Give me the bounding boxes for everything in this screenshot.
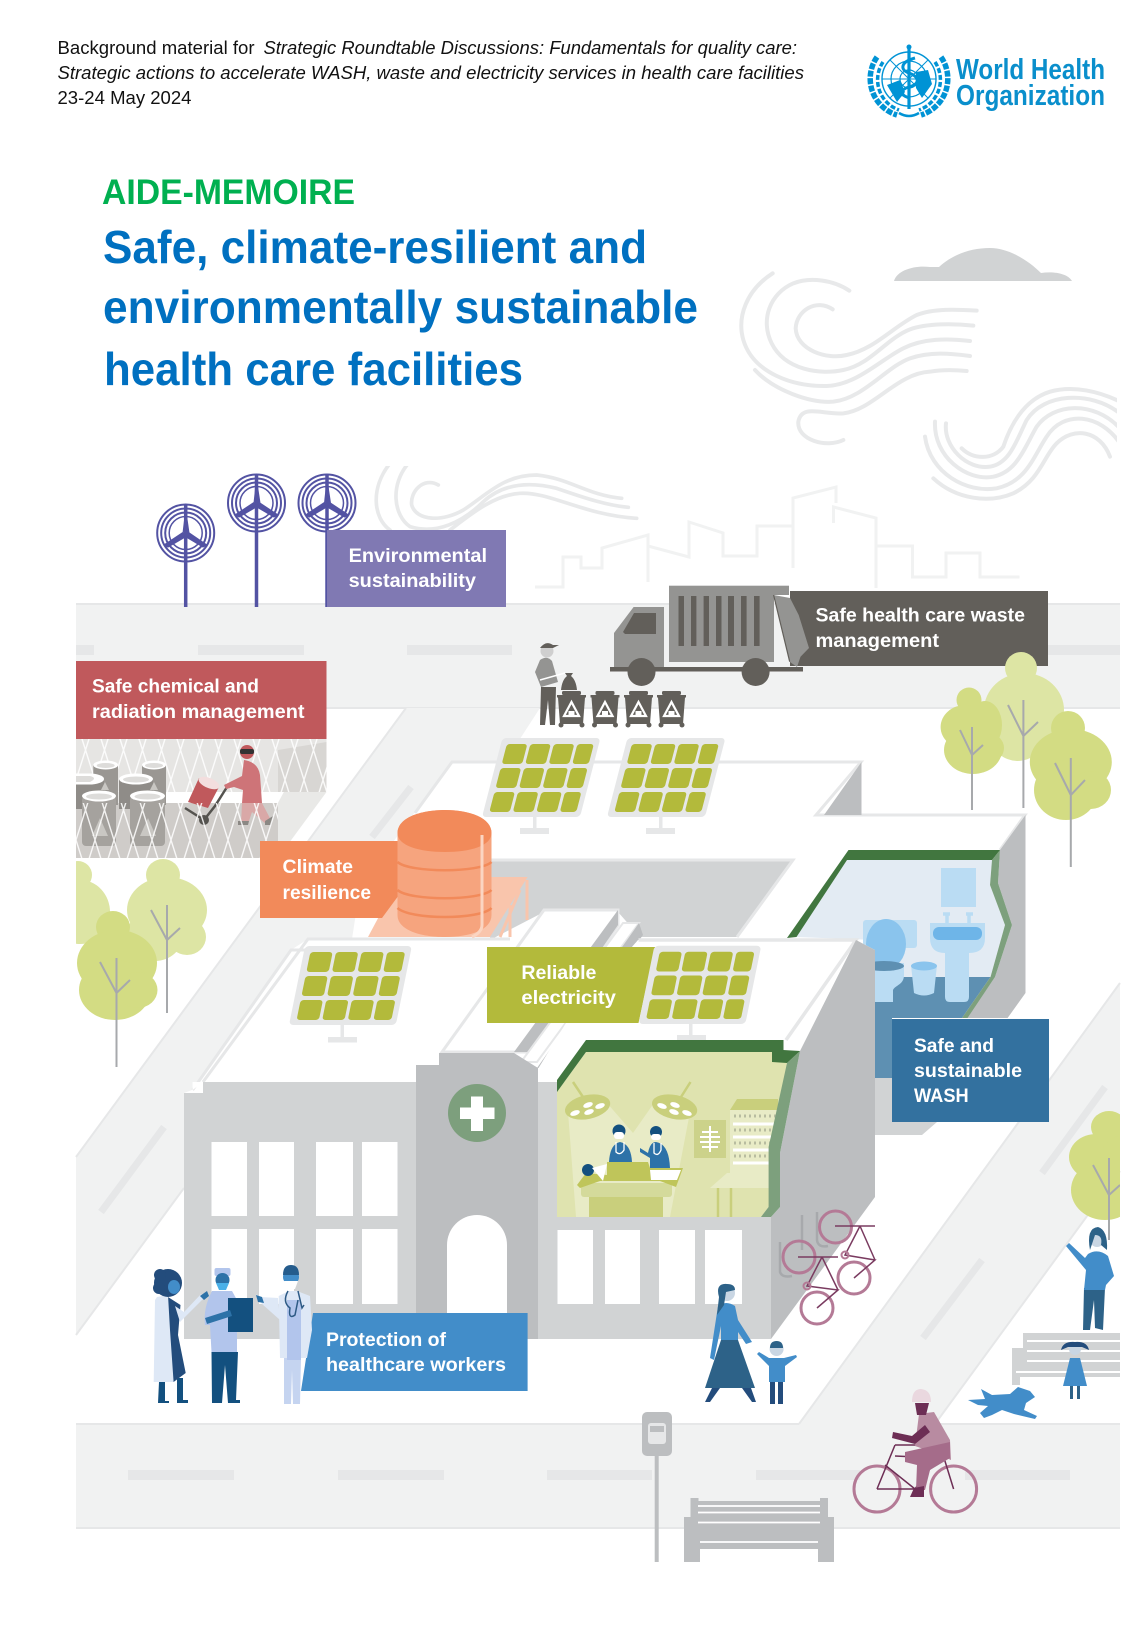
desk <box>710 1173 772 1217</box>
waste bins <box>557 673 686 728</box>
right bench with child <box>1012 1333 1120 1399</box>
x-ray <box>694 1120 726 1158</box>
lower lattice overlay <box>76 803 278 858</box>
WHO logo <box>870 44 1105 116</box>
cyclist <box>854 1389 977 1512</box>
title: health care facilities <box>104 343 523 395</box>
mirror <box>941 868 976 907</box>
right diagonal road <box>799 983 1120 1424</box>
WASH label: WASH <box>914 1086 969 1107</box>
courtyard <box>490 860 793 940</box>
bus stop sign <box>642 1412 672 1562</box>
reliable electricity label: electricity <box>521 988 616 1009</box>
lamps <box>563 1082 700 1124</box>
tree <box>127 859 207 1013</box>
toilet <box>850 919 917 1002</box>
child on bench <box>1061 1342 1089 1399</box>
reliable electricity label <box>487 947 655 1023</box>
tree <box>941 688 1004 810</box>
surgeon with clipboard <box>205 1268 253 1403</box>
turbine 1 <box>157 504 214 607</box>
WASH label: Safe and <box>914 1036 994 1057</box>
icon: garbage truck <box>610 586 809 686</box>
header reference text: Background material for <box>58 38 255 58</box>
central tower <box>416 1053 538 1339</box>
icon: cloud <box>894 248 1072 281</box>
worker in red <box>224 745 273 825</box>
tree cluster left <box>76 859 207 1067</box>
bucket <box>911 962 937 996</box>
waste worker <box>535 643 565 725</box>
safe chemical label: Safe chemical and <box>92 677 259 698</box>
tailgate <box>774 595 809 667</box>
side wall front building <box>771 940 875 1339</box>
cab <box>614 607 664 667</box>
woman and child <box>705 1284 797 1404</box>
city skyline outline <box>535 487 1020 588</box>
environmental sustainability label: Environmental <box>349 546 487 567</box>
bicycles on wall <box>780 1211 875 1324</box>
tree right of road <box>1069 1111 1120 1240</box>
surgeons <box>609 1124 670 1168</box>
environmental sustainability label <box>327 530 506 607</box>
operating table <box>577 1162 683 1217</box>
wind swirl behind turbines <box>376 463 637 530</box>
medicine shelf <box>730 1099 778 1174</box>
tree cluster right <box>941 652 1112 867</box>
back building roof <box>368 762 1025 940</box>
header reference text: Strategic actions to accelerate WASH, waste and electricity services in health care facilities <box>58 63 804 83</box>
wall trim <box>962 850 1012 1018</box>
climate resilience label: resilience <box>282 883 371 904</box>
platform and water tank <box>368 877 528 937</box>
right wing facade <box>538 1082 771 1339</box>
WASH label: sustainable <box>914 1061 1022 1082</box>
bench <box>684 1498 834 1562</box>
windows left wing <box>212 1142 398 1304</box>
drums <box>76 760 166 846</box>
safe chemical label: radiation management <box>92 702 305 723</box>
header reference text <box>58 38 804 108</box>
solar panel 4 <box>638 946 761 1040</box>
turbine 3 <box>298 474 356 607</box>
WHO wordmark <box>956 54 1105 112</box>
front roof <box>193 939 510 1090</box>
safe health care waste management label <box>790 591 1048 666</box>
eyebrow heading: AIDE-MEMOIRE <box>102 173 355 212</box>
skylights <box>442 910 643 1068</box>
icon: water tank <box>398 810 492 937</box>
WHO wordmark: World Health <box>956 54 1105 86</box>
sink <box>930 914 985 1002</box>
safe chemical label <box>76 661 326 739</box>
solar panel 1 <box>482 738 600 834</box>
solar panel 2 <box>607 738 725 834</box>
tree <box>984 652 1064 808</box>
panel: safe and sustainable WASH room <box>787 815 1026 1135</box>
container <box>669 594 774 662</box>
title: environmentally sustainable <box>103 281 698 333</box>
wind swirl upper <box>741 273 977 443</box>
wind turbines <box>157 474 356 607</box>
red drum and dolly <box>185 774 227 825</box>
health workers <box>153 1265 312 1404</box>
icon: WHO emblem <box>870 47 948 116</box>
dog <box>968 1387 1037 1419</box>
safe health care waste management label: Safe health care waste <box>816 606 1025 627</box>
chemical management panel <box>76 739 326 858</box>
child <box>757 1341 797 1404</box>
climate resilience label <box>260 841 410 918</box>
protection label: Protection of <box>326 1330 447 1351</box>
side wall <box>967 815 1026 1018</box>
title <box>103 221 698 395</box>
header reference text: Strategic Roundtable Discussions: Fundamentals for quality care: <box>264 38 797 58</box>
panel: operating room <box>557 1040 800 1217</box>
icon: green cross <box>448 1084 506 1142</box>
wheels <box>628 658 656 686</box>
room trim <box>761 1051 800 1217</box>
climate resilience label: Climate <box>282 857 353 878</box>
protection label <box>301 1313 528 1391</box>
door <box>447 1215 507 1339</box>
doctor with stethoscope <box>256 1265 312 1404</box>
woman doctor <box>153 1269 209 1403</box>
header reference text: 23-24 May 2024 <box>58 88 192 108</box>
environmental sustainability label: sustainability <box>349 571 476 592</box>
WHO wordmark: Organization <box>956 80 1105 112</box>
upper road <box>76 604 1120 708</box>
solar panel 3 <box>289 946 412 1042</box>
lower road <box>76 1424 1120 1528</box>
title: Safe, climate-resilient and <box>103 221 647 273</box>
floor <box>860 977 990 1078</box>
left diagonal road <box>76 708 540 1335</box>
protection label: healthcare workers <box>326 1355 506 1376</box>
woman standing right <box>1066 1227 1114 1330</box>
WASH label <box>892 1019 1049 1122</box>
under room block <box>875 1078 937 1135</box>
main facade <box>184 1082 416 1339</box>
wind swirl right <box>925 389 1120 499</box>
safe health care waste management label: management <box>816 631 940 652</box>
chassis <box>610 667 803 672</box>
reliable electricity label: Reliable <box>521 963 596 984</box>
light cones <box>568 1103 690 1217</box>
front right roof <box>530 940 875 1082</box>
tree <box>1030 711 1112 867</box>
turbine 2 <box>228 474 285 607</box>
tree <box>77 911 158 1067</box>
room interior <box>796 860 1005 977</box>
